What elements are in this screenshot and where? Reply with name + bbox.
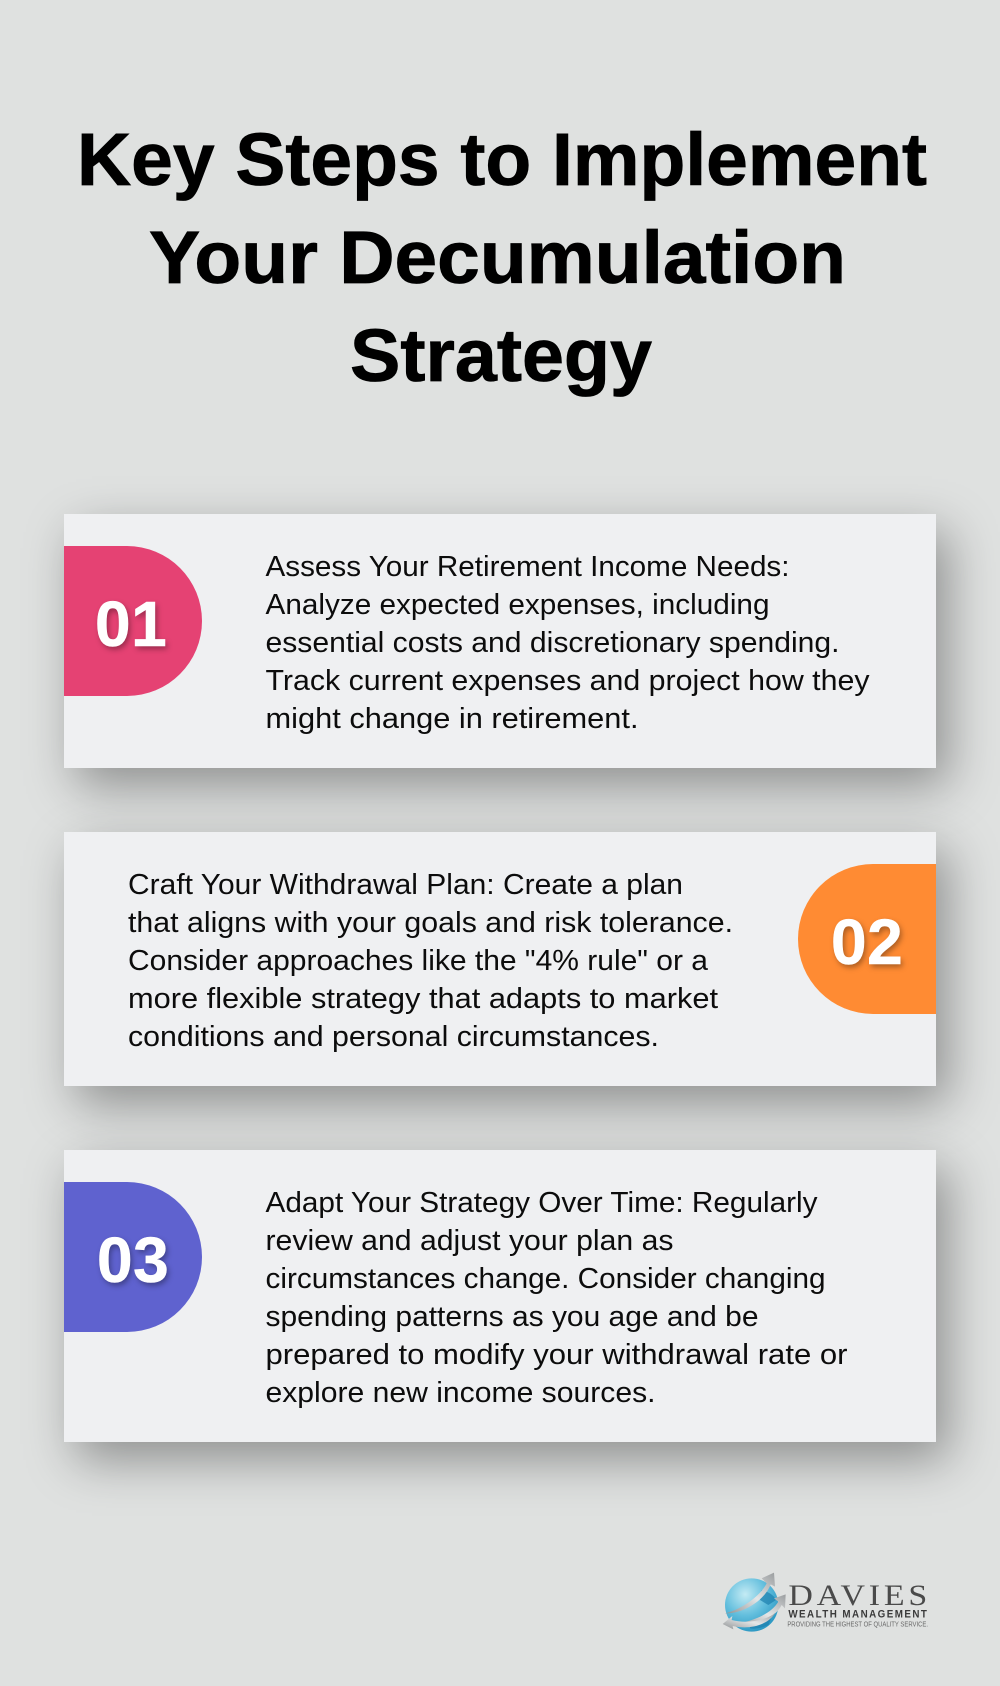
badge: 01 [64,546,202,696]
text: step 3 description: prepared to modify your withdrawal rate or [266,1339,848,1371]
text: step 2 description: Consider approaches like the "4% rule" or a [128,945,709,977]
number 02: 02 [831,906,903,978]
text: step 1 description: might change in retirement. [266,703,638,735]
logo wordmark [787,1579,931,1629]
logo wordmark: DAVIES [788,1579,931,1612]
title [77,118,927,397]
text: step 2 description: more flexible strategy that adapts to market [128,983,718,1015]
text: step 2 description: conditions and personal circumstances. [128,1021,659,1053]
badge: 02 [798,864,936,1014]
icon: globe with arrows [723,1573,786,1632]
number 01: 01 [95,588,167,660]
panel: step 2 [64,832,936,1086]
title: Your Decumulation [149,216,846,299]
logo wordmark: PROVIDING THE HIGHEST OF QUALITY SERVICE. [787,1620,928,1629]
text: step 1 description: Assess Your Retirement Income Needs: [266,551,790,583]
text: step 3 description: explore new income sources. [266,1377,656,1409]
text: step 3 description [266,1187,848,1409]
title: Key Steps to Implement [77,118,927,201]
badge: 03 [64,1182,202,1332]
text: step 3 description: spending patterns as you age and be [266,1301,758,1333]
text: step 3 description: Adapt Your Strategy Over Time: Regularly [266,1187,818,1219]
text: step 1 description: Analyze expected expenses, including [266,589,770,621]
number 03: 03 [97,1224,169,1296]
logo wordmark: WEALTH MANAGEMENT [788,1609,928,1621]
title: Strategy [350,314,652,397]
text: step 1 description: Track current expenses and project how they [266,665,870,697]
text: step 1 description: essential costs and discretionary spending. [266,627,840,659]
text: step 1 description [266,551,870,735]
panel: step 1 [64,514,936,768]
panel: step 3 [64,1150,936,1442]
text: step 3 description: review and adjust your plan as [266,1225,674,1257]
logo: Davies Wealth Management [722,1572,931,1632]
text: step 3 description: circumstances change. Consider changing [266,1263,826,1295]
text: step 2 description: that aligns with your goals and risk tolerance. [128,907,733,939]
text: step 2 description: Craft Your Withdrawal Plan: Create a plan [128,869,683,901]
text: step 2 description [128,869,733,1053]
